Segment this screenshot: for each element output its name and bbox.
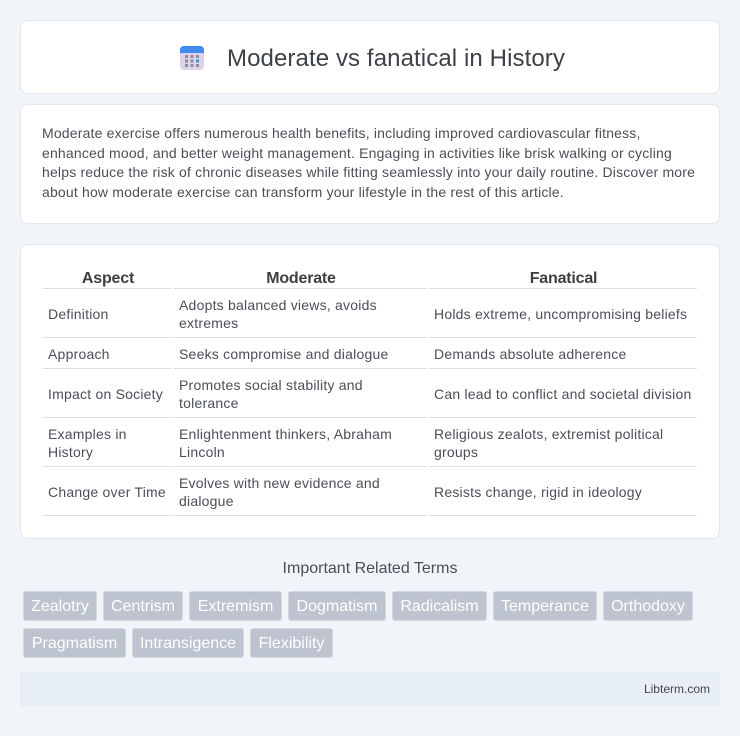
tag: Extremism: Extremism: [198, 598, 273, 615]
tag: Centrism: [103, 591, 183, 621]
row: Impact on Society: Impact on Society: [48, 386, 163, 402]
Approach fanatical: Demands absolute adherence: [434, 346, 627, 362]
Examples moderate: Enlightenment thinkers, Abraham: [179, 426, 392, 442]
panel: introduction: [20, 104, 720, 224]
tag: Zealotry: [23, 591, 97, 621]
tag: Temperance: [493, 591, 597, 621]
tag: Orthodoxy: [603, 591, 693, 621]
title: Moderate vs fanatical in History: [227, 45, 565, 72]
row: Examples in History: [48, 426, 127, 460]
Definition moderate: Adopts balanced views, avoids: [179, 297, 377, 313]
intro text: enhanced mood, and better weight management. Engaging in activities like brisk walking or cycling: [42, 144, 672, 160]
intro text: Moderate exercise offers numerous health benefits, including improved cardiovascular fitness,: [42, 125, 641, 141]
tag: Dogmatism: [288, 591, 386, 621]
intro text: about how moderate exercise can transform your lifestyle in the rest of this article.: [42, 184, 564, 200]
tag: Zealotry: Zealotry: [31, 598, 89, 615]
tag: Temperance: Temperance: [501, 598, 589, 615]
tag: Dogmatism: Dogmatism: [297, 598, 377, 615]
Definition moderate: extremes: [179, 315, 238, 331]
Definition fanatical: Holds extreme, uncompromising beliefs: [434, 306, 687, 322]
Examples moderate: Lincoln: [179, 444, 225, 460]
row: Definition: Definition: [48, 306, 109, 322]
row: Examples in History: Examples in: [48, 426, 127, 442]
row: Approach: Approach: [48, 346, 110, 362]
Change fanatical: Resists change, rigid in ideology: [434, 484, 642, 500]
icon: calendar: [180, 46, 204, 70]
tag: Flexibility: [250, 628, 333, 658]
tag: Pragmatism: [23, 628, 126, 658]
table heading: Moderate: Moderate: [266, 270, 336, 287]
tag: Radicalism: Radicalism: [400, 598, 479, 615]
intro text: helps reduce the risk of chronic diseases while fitting seamlessly into your daily routine. Discover more: [42, 164, 695, 180]
Definition moderate: [179, 297, 377, 331]
panel: comparison table: [20, 244, 720, 539]
tag: Intransigence: Intransigence: [140, 635, 236, 652]
Impact moderate: [179, 377, 363, 411]
Impact moderate: Promotes social stability and: [179, 377, 363, 393]
table heading: Aspect: Aspect: [82, 270, 134, 287]
tag: Centrism: Centrism: [111, 598, 175, 615]
tag: Flexibility: Flexibility: [259, 635, 324, 652]
Examples fanatical: [434, 426, 663, 460]
related terms tags: [23, 591, 693, 658]
Examples fanatical: groups: [434, 444, 478, 460]
related terms heading: Important Related Terms: [283, 560, 457, 577]
Impact moderate: tolerance: [179, 395, 239, 411]
Impact fanatical: Can lead to conflict and societal division: [434, 386, 692, 402]
tag: Extremism: [189, 591, 282, 621]
tag: Pragmatism: Pragmatism: [32, 635, 117, 652]
Change moderate: dialogue: [179, 493, 234, 509]
intro text: [42, 125, 695, 200]
footer credit: Libterm.com: [644, 682, 710, 696]
Change moderate: [179, 475, 380, 509]
header panel: [20, 20, 720, 94]
Examples moderate: [179, 426, 392, 460]
tag: Radicalism: [392, 591, 487, 621]
row: Change over Time: Change over Time: [48, 484, 166, 500]
Examples fanatical: Religious zealots, extremist political: [434, 426, 663, 442]
tag: Orthodoxy: Orthodoxy: [611, 598, 685, 615]
tag: Intransigence: [132, 628, 244, 658]
Change moderate: Evolves with new evidence and: [179, 475, 380, 491]
Approach moderate: Seeks compromise and dialogue: [179, 346, 388, 362]
table heading: Fanatical: Fanatical: [530, 270, 597, 287]
footer bar: [20, 672, 720, 706]
row: Examples in History: History: [48, 444, 93, 460]
